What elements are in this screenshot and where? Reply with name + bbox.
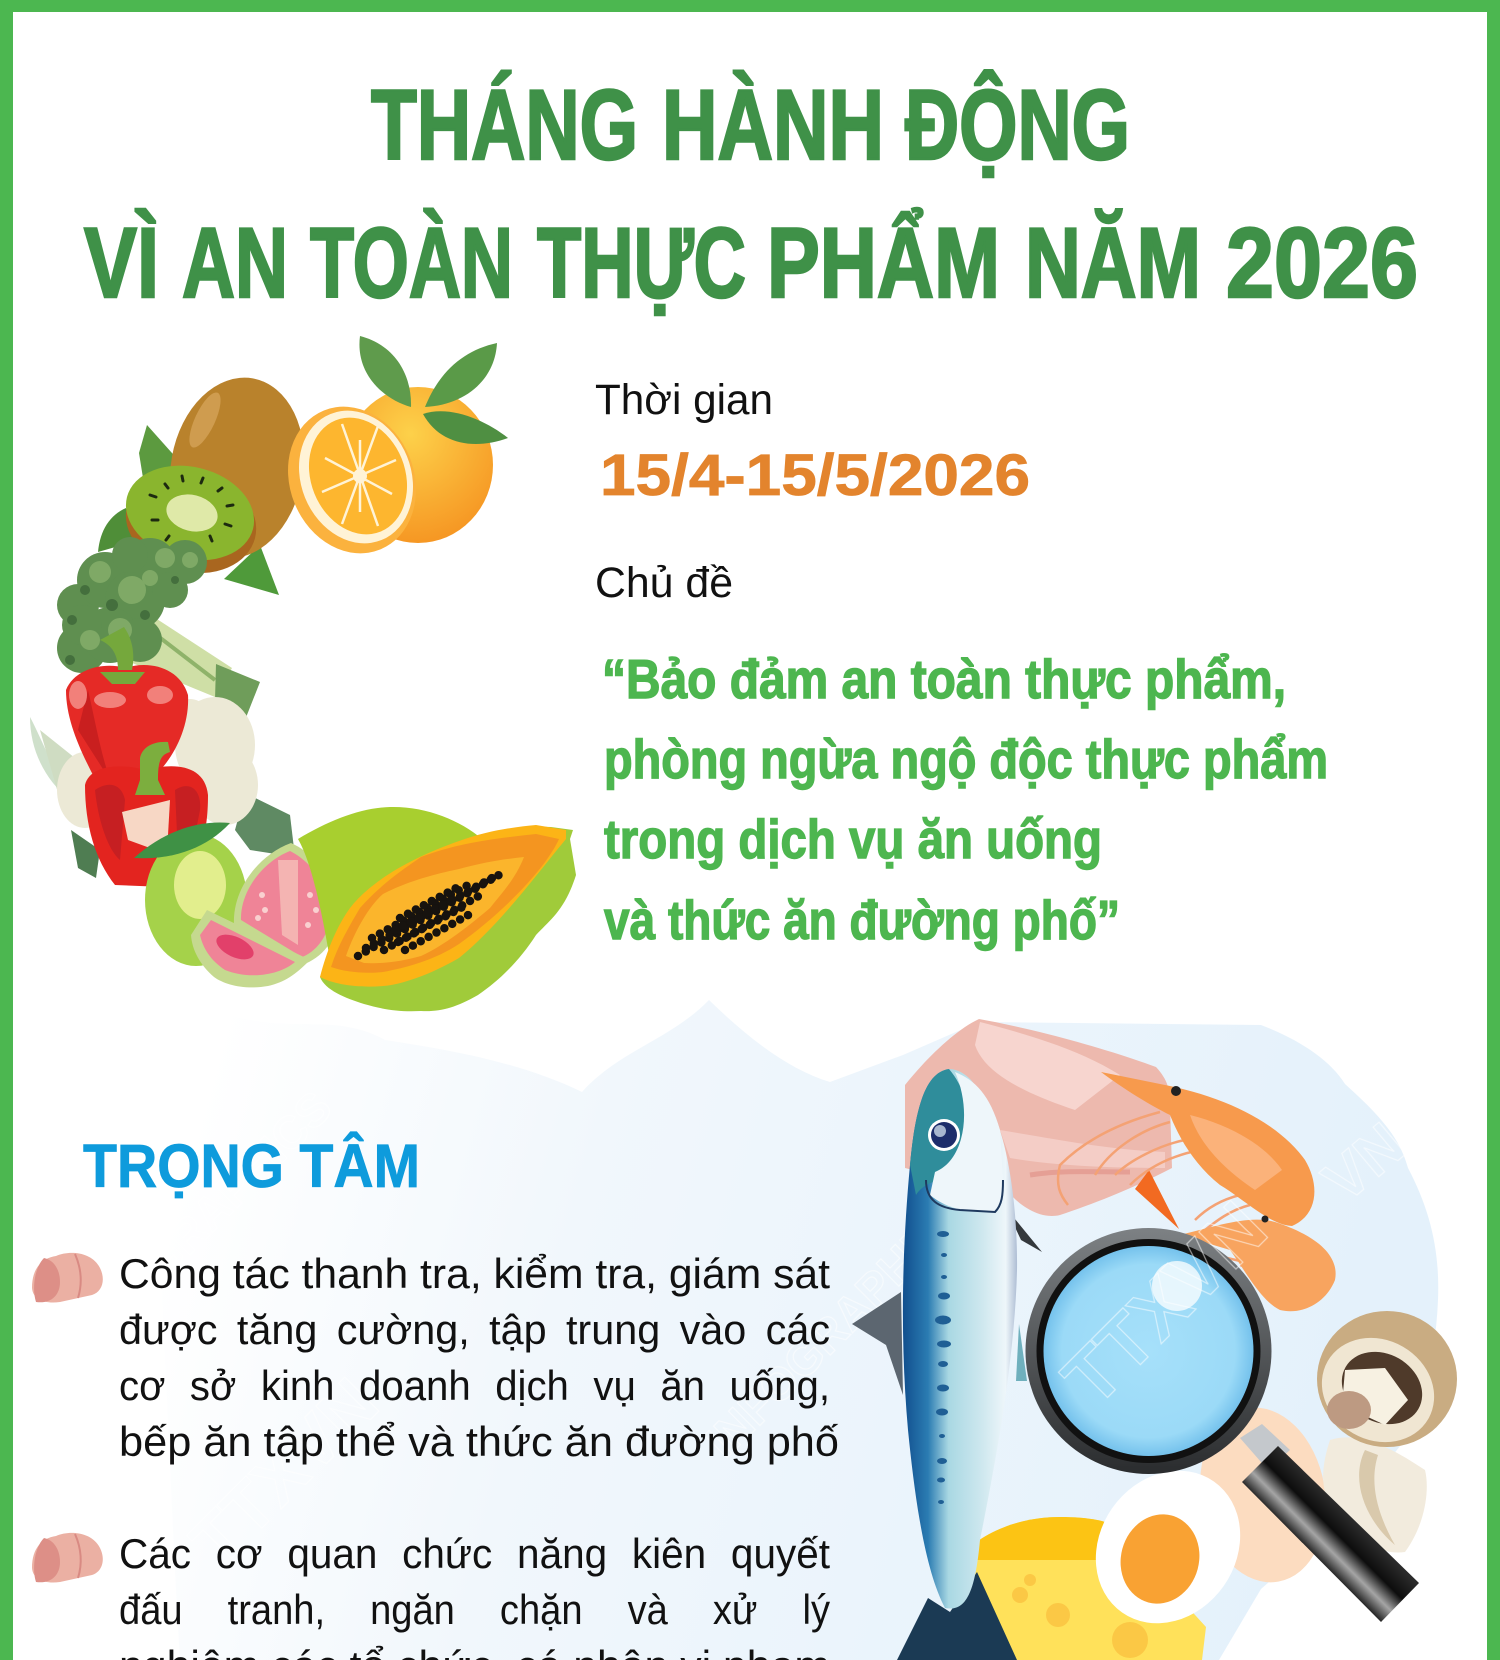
icon: mushroom bbox=[1303, 1311, 1457, 1553]
text block: theme: trong dịch vụ ăn uống bbox=[604, 808, 1102, 870]
text block: focus item 1: cơ sở kinh doanh dịch vụ ăn uống, bbox=[119, 1362, 830, 1409]
watermarks: INFOGRAPHICS bbox=[55, 1081, 341, 1367]
bullet icon: meat 1 bbox=[32, 1253, 103, 1302]
illustration: food under magnifier bbox=[852, 1019, 1457, 1660]
watermark: foreground: TTXVN bbox=[1047, 1186, 1283, 1422]
text block: time: Thời gian bbox=[595, 376, 773, 424]
icon: meat bbox=[905, 1019, 1172, 1216]
bullet icon: meat 2 bbox=[32, 1533, 103, 1582]
text block: focus item 1: bếp ăn tập thể và thức ăn đường phố bbox=[119, 1418, 839, 1465]
text block: focus item 1: Công tác thanh tra, kiểm tra, giám sát bbox=[119, 1250, 830, 1297]
text block: theme: “Bảo đảm an toàn thực phẩm, bbox=[602, 648, 1286, 710]
watermark: foreground bbox=[1047, 1082, 1450, 1422]
icon: fish bbox=[852, 1069, 1042, 1660]
title: TOÀN bbox=[310, 207, 513, 318]
text block: theme bbox=[595, 559, 1328, 951]
title: HÀNH bbox=[662, 69, 884, 180]
title: THỰC bbox=[537, 207, 746, 318]
text block: theme: phòng ngừa ngộ độc thực phẩm bbox=[604, 728, 1328, 790]
title: NĂM bbox=[1025, 207, 1201, 318]
icon: whole egg bbox=[1187, 1398, 1339, 1592]
icon: shrimp bbox=[1058, 1072, 1336, 1311]
title bbox=[84, 69, 1418, 318]
illustration: fruit and vegetable wreath bbox=[30, 336, 576, 1011]
icon: broccoli bbox=[57, 537, 260, 720]
title: PHẨM bbox=[767, 207, 1000, 318]
text block: theme: và thức ăn đường phố” bbox=[604, 889, 1120, 951]
icon: cauliflower bbox=[30, 697, 295, 878]
watermarks: INFOGRAPHICS bbox=[695, 1181, 981, 1467]
icon: red peppers bbox=[66, 627, 208, 887]
icon: halved egg bbox=[1066, 1442, 1270, 1652]
text block: focus item 1 bbox=[119, 1250, 839, 1465]
title: THÁNG bbox=[371, 69, 638, 180]
text block: focus item 2 bbox=[119, 1530, 830, 1660]
text block: focus item 2: đấu tranh, ngăn chặn và xử lý bbox=[119, 1586, 830, 1633]
watermarks: TTXVN bbox=[175, 1363, 393, 1581]
watermark: foreground: VNA bbox=[1310, 1082, 1450, 1215]
heading: focus: TRỌNG TÂM bbox=[83, 1132, 420, 1200]
text block: focus item 2: Các cơ quan chức năng kiên quyết bbox=[119, 1530, 830, 1577]
title: AN bbox=[182, 207, 288, 318]
icon: papaya bbox=[298, 807, 576, 1011]
title: 2026 bbox=[1226, 207, 1418, 318]
watermarks bbox=[55, 1081, 981, 1581]
icon: cheese bbox=[955, 1517, 1206, 1660]
icon: kiwi bbox=[98, 367, 318, 595]
text block: focus item 1: được tăng cường, tập trung vào các bbox=[119, 1306, 830, 1353]
title: VÌ bbox=[84, 207, 159, 318]
icon: orange bbox=[266, 336, 508, 573]
background: pale blue mountain shape bbox=[110, 940, 1438, 1660]
icon: guava bbox=[134, 822, 339, 987]
title: ĐỘNG bbox=[905, 69, 1130, 180]
text block: time: 15/4-15/5/2026 bbox=[600, 443, 1030, 508]
text block: theme: Chủ đề bbox=[595, 559, 733, 607]
text block: time bbox=[595, 376, 1030, 508]
icon: magnifying glass bbox=[1026, 1228, 1419, 1622]
